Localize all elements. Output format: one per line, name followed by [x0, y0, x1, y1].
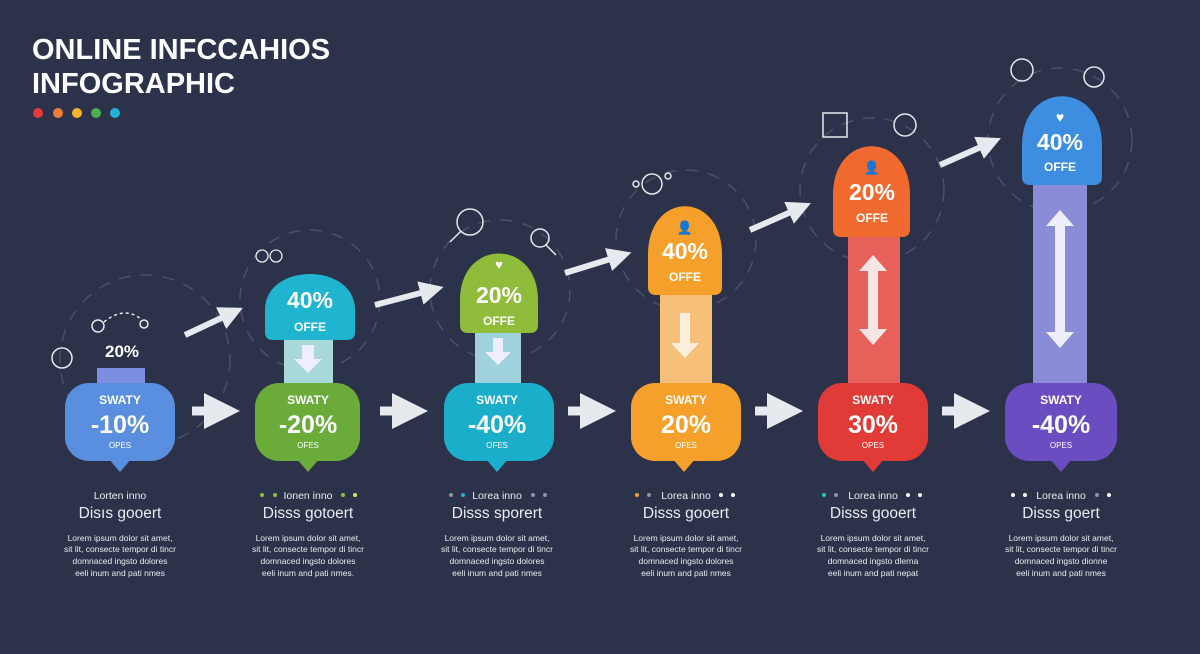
column 4: OFES: [675, 441, 697, 450]
captions: sit lit, consecte tempor di tincr: [252, 544, 364, 554]
column 4: 40%: [662, 238, 708, 264]
captions: domnaced ingsto dolores: [450, 556, 544, 566]
column 4: 20%: [661, 411, 711, 439]
captions: eeli inum and pati nmes: [1016, 568, 1106, 578]
column 1: -10%: [91, 411, 149, 439]
column 1: [52, 313, 175, 472]
column 2: [255, 250, 360, 472]
captions: sit lit, consecte tempor di tincr: [1005, 544, 1117, 554]
column 6: SWATY: [1040, 393, 1082, 407]
captions: Lorem ipsum dolor sit amet,: [634, 533, 738, 543]
column 2: -20%: [279, 411, 337, 439]
captions: eeli inum and pati nmes: [75, 568, 165, 578]
diagonal arrows: [185, 143, 990, 335]
column 3: [444, 209, 556, 472]
column 4: [631, 173, 741, 472]
title: [32, 34, 330, 100]
captions: Ionen inno: [283, 490, 333, 502]
captions: domnaced ingsto dolores: [73, 556, 167, 566]
column 4: 👤: [677, 220, 693, 235]
column 5: SWATY: [852, 393, 894, 407]
column 3: OFES: [486, 441, 508, 450]
horizontal arrows: [192, 406, 972, 416]
captions: Lorea inno: [848, 490, 898, 502]
column 5: 20%: [849, 179, 895, 205]
captions: domnaced ingsto dlerna: [828, 556, 919, 566]
column 3: OFFE: [483, 314, 515, 328]
captions: Lorem ipsum dolor sit amet,: [1009, 533, 1113, 543]
captions: Lorea inno: [472, 490, 522, 502]
captions: eeli inum and pati nepat: [828, 568, 919, 578]
column 6: [1005, 59, 1117, 472]
captions: Lorea inno: [661, 490, 711, 502]
column 5: OPES: [862, 441, 884, 450]
captions: Disss sporert: [452, 505, 543, 522]
column 3: ♥: [495, 257, 503, 272]
captions: sit lit, consecte tempor di tincr: [64, 544, 176, 554]
captions: Disss gotoert: [263, 505, 354, 522]
column 5: 👤: [864, 160, 880, 175]
captions: sit lit, consecte tempor di tincr: [441, 544, 553, 554]
column 2: SWATY: [287, 393, 329, 407]
column 2: OFFE: [294, 320, 326, 334]
captions: Lorem ipsum dolor sit amet,: [256, 533, 360, 543]
captions: Lorea inno: [1036, 490, 1086, 502]
column 4: OFFE: [669, 270, 701, 284]
captions: Lorem ipsum dolor sit amet,: [445, 533, 549, 543]
column 2: OFES: [297, 441, 319, 450]
bubble: [65, 383, 175, 461]
column 1: 20%: [105, 342, 139, 361]
captions: Disss gooert: [643, 505, 730, 522]
captions: eeli inum and pati nmes: [641, 568, 731, 578]
column 6: 40%: [1037, 129, 1083, 155]
captions: domnaced ingsto dolores: [261, 556, 355, 566]
captions: sit lit, consecte tempor di tincr: [630, 544, 742, 554]
column 3: -40%: [468, 411, 526, 439]
captions: sit lit, consecte tempor di tincr: [817, 544, 929, 554]
column 3: SWATY: [476, 393, 518, 407]
captions: Lorem ipsum dolor sit amet,: [68, 533, 172, 543]
captions: domnaced ingsto dolores: [639, 556, 733, 566]
column 5: [818, 113, 928, 472]
column 1: OPES: [109, 441, 131, 450]
column 5: OFFE: [856, 211, 888, 225]
column 6: OFFE: [1044, 160, 1076, 174]
captions: eeli inum and pati nmes.: [262, 568, 354, 578]
column 3: 20%: [476, 282, 522, 308]
captions: Disss goert: [1022, 505, 1100, 522]
column 2: 40%: [287, 287, 333, 313]
color dots: [33, 108, 120, 118]
column 5: 30%: [848, 411, 898, 439]
column 1: SWATY: [99, 393, 141, 407]
icons col1: [52, 313, 148, 368]
column 6: -40%: [1032, 411, 1090, 439]
captions: eeli inum and pati nmes: [452, 568, 542, 578]
captions: domnaced ingsto dionne: [1015, 556, 1108, 566]
column 4: SWATY: [665, 393, 707, 407]
captions: Lorem ipsum dolor sit amet,: [821, 533, 925, 543]
captions: Lorten inno: [94, 490, 146, 502]
captions: [64, 490, 1117, 578]
title: ONLINE INFCCAHIOS: [32, 34, 330, 66]
captions: Disss gooert: [830, 505, 917, 522]
column 6: ♥: [1056, 109, 1064, 125]
captions: Disıs gooert: [79, 505, 162, 522]
title: INFOGRAPHIC: [32, 68, 235, 100]
column 6: OPES: [1050, 441, 1072, 450]
dashed circles decoration: [60, 68, 1132, 445]
